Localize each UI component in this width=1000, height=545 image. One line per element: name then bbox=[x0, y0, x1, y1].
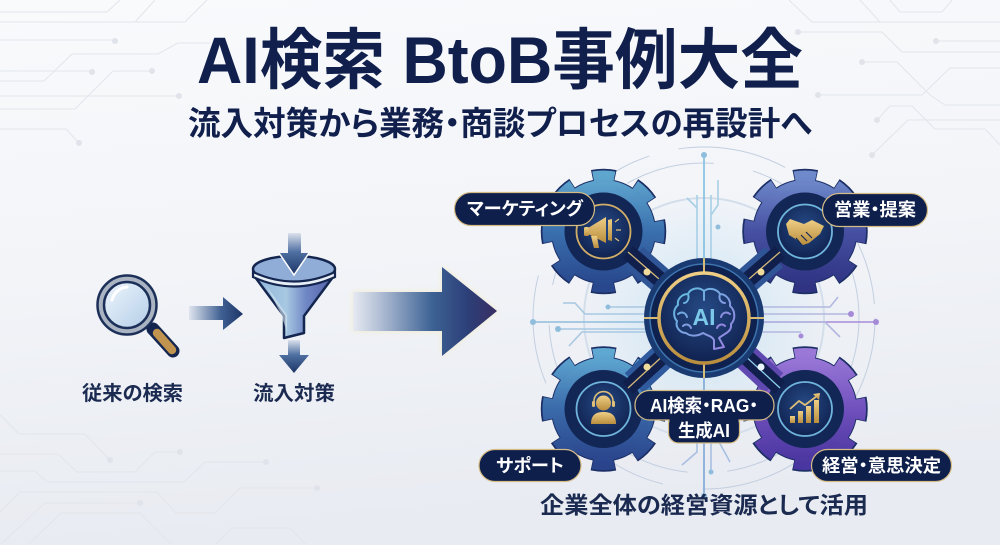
pill: AI search, RAG, generative AI: 生成AI bbox=[678, 420, 730, 441]
icon: magnifying glass bbox=[98, 276, 173, 351]
pill: marketing: マーケティング bbox=[467, 198, 584, 219]
gear: marketing bbox=[548, 176, 660, 288]
icon: growth chart bbox=[790, 393, 820, 423]
arrow: search to funnel bbox=[189, 297, 243, 330]
icon: brain outline bbox=[674, 288, 734, 349]
icon: headset operator bbox=[591, 392, 616, 424]
icon: handshake bbox=[786, 219, 824, 245]
pill: AI search, RAG, generative AI: AI検索・RAG・ bbox=[650, 396, 758, 416]
icon: megaphone bbox=[584, 217, 621, 248]
pill: support: サポート bbox=[496, 455, 564, 476]
label: inflow measures: 流入対策 bbox=[253, 382, 335, 405]
subtitle: 流入対策から業務・商談プロセスの再設計へ bbox=[188, 105, 812, 142]
gear: management bbox=[749, 353, 861, 465]
gear: sales bbox=[749, 176, 861, 288]
pill: marketing bbox=[454, 192, 594, 226]
concentric circuit network bbox=[530, 147, 879, 499]
gear: support bbox=[548, 353, 660, 465]
pill: support bbox=[479, 450, 581, 482]
central AI hub bbox=[644, 258, 764, 378]
label: traditional search: 従来の検索 bbox=[82, 382, 183, 405]
caption: 企業全体の経営資源として活用 bbox=[540, 492, 868, 518]
icon: funnel with arrows bbox=[253, 233, 335, 373]
large arrow bbox=[353, 267, 497, 356]
icon label: AI: AI bbox=[692, 304, 716, 330]
pill: sales and proposals bbox=[822, 194, 928, 226]
connectors to hub bbox=[628, 252, 780, 388]
pill: management decisions: 経営・意思決定 bbox=[822, 456, 941, 476]
pill: sales and proposals: 営業・提案 bbox=[834, 199, 916, 220]
title: AI検索 BtoB事例大全 bbox=[197, 23, 803, 97]
pill: AI search, RAG, generative AI bbox=[635, 390, 774, 443]
pill: management decisions bbox=[812, 450, 952, 482]
